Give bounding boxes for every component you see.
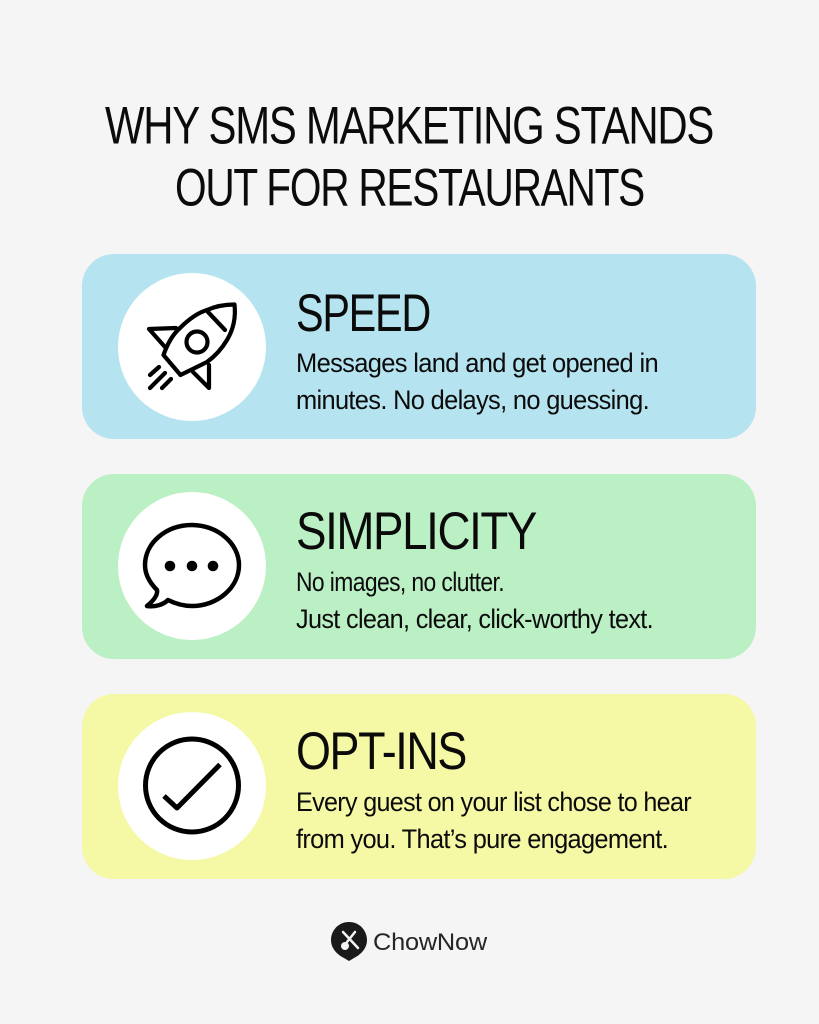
heading: opt-ins: OPT-INS <box>296 722 466 781</box>
text: opt-ins description: from you. That’s pure engagement. <box>296 824 668 854</box>
logo: ChowNow <box>331 922 488 961</box>
icon: rocket <box>118 273 266 421</box>
text: opt-ins description <box>296 787 692 854</box>
text: speed description: Messages land and get opened in <box>296 348 658 378</box>
icon: fork and spoon pin <box>331 922 367 961</box>
wordmark: ChowNow <box>373 929 488 956</box>
icon: check circle <box>118 712 266 860</box>
text: opt-ins description: Every guest on your list chose to hear <box>296 787 692 817</box>
icon: speech bubble <box>118 492 266 640</box>
panel: opt-ins <box>82 694 756 879</box>
text: simplicity description: Just clean, clear, click-worthy text. <box>296 604 653 634</box>
heading: simplicity: SIMPLICITY <box>296 502 536 561</box>
panel: simplicity <box>82 474 756 659</box>
text: simplicity description: No images, no clutter. <box>296 567 504 597</box>
text: simplicity description <box>296 567 653 634</box>
text: speed description: minutes. No delays, no guessing. <box>296 385 649 415</box>
title <box>105 96 713 218</box>
heading: speed: SPEED <box>296 284 430 343</box>
text: speed description <box>296 348 658 415</box>
title: OUT FOR RESTAURANTS <box>175 158 644 218</box>
panel: speed <box>82 254 756 439</box>
